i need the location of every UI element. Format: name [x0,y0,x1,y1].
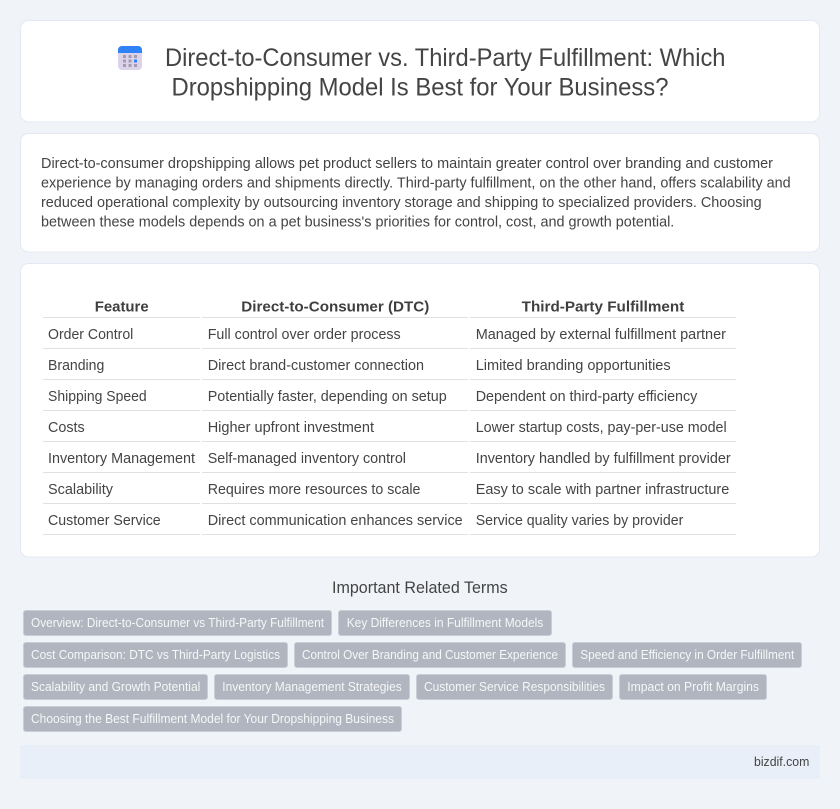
tag: Overview: Direct-to-Consumer vs Third-Party Fulfillment [31,616,324,630]
panel: summary [20,134,820,252]
panel: title card [20,20,820,122]
summary text [41,156,791,230]
tag: Scalability and Growth Potential [31,680,200,694]
row: shipping speed: Dependent on third-party efficiency [476,389,698,405]
tag [24,610,332,636]
summary text: between these models depends on a pet business's priorities for control, cost, and growth potential. [41,214,674,230]
panel: comparison table [20,264,820,557]
summary text: reduced operational complexity by outsourcing inventory storage and shipping to specialized providers. Choosing [41,195,762,211]
row: branding: Branding [48,358,104,374]
tag: Speed and Efficiency in Order Fulfillment [580,648,795,662]
tag: Key Differences in Fulfillment Models [347,616,543,630]
row: inventory management: Self-managed inventory control [208,451,406,467]
table header: Third-Party Fulfillment [522,298,684,316]
tag [416,674,612,700]
row: shipping speed: Potentially faster, depending on setup [208,389,447,405]
row: shipping speed: Shipping Speed [48,389,147,405]
title: Dropshipping Model Is Best for Your Business? [172,74,668,102]
row: shipping speed [48,389,698,405]
row: inventory management: Inventory handled by fulfillment provider [476,451,731,467]
row: scalability: Scalability [48,482,114,498]
tag [572,642,802,668]
tag list: related terms [24,610,802,732]
row: branding: Direct brand-customer connection [208,358,424,374]
row: branding [48,358,671,374]
row: branding: Limited branding opportunities [476,358,671,374]
icon: calendar [118,46,142,70]
tag [294,642,566,668]
tag: Inventory Management Strategies [222,680,402,694]
row: costs [48,420,727,436]
tag: Control Over Branding and Customer Experience [302,648,558,662]
row: order control: Full control over order process [208,327,401,343]
row: customer service: Direct communication enhances service [208,513,463,529]
tag [620,674,766,700]
table header [95,298,684,316]
row: costs: Costs [48,420,85,436]
table header: Direct-to-Consumer (DTC) [241,298,429,316]
row: order control: Managed by external fulfillment partner [476,327,726,343]
row: customer service [48,513,683,529]
tag [214,674,410,700]
row: costs: Higher upfront investment [208,420,374,436]
row: scalability: Requires more resources to scale [208,482,420,498]
row: inventory management [48,451,731,467]
tag: Impact on Profit Margins [627,680,759,694]
title [165,45,726,102]
tag: Choosing the Best Fulfillment Model for Your Dropshipping Business [31,712,394,726]
footer [20,745,820,779]
row: costs: Lower startup costs, pay-per-use model [476,420,727,436]
row: order control [48,327,726,343]
tag [24,674,208,700]
footer: bizdif.com [754,754,809,769]
tag [24,706,402,732]
summary text: experience by managing orders and shipments directly. Third-party fulfillment, on the other hand, offers scalability and [41,176,791,192]
table header: Feature [95,298,149,316]
row: customer service: Customer Service [48,513,161,529]
tag: Cost Comparison: DTC vs Third-Party Logistics [31,648,280,662]
heading: related terms: Important Related Terms [332,579,508,597]
row: customer service: Service quality varies by provider [476,513,683,529]
row: inventory management: Inventory Management [48,451,195,467]
tag: Customer Service Responsibilities [424,680,605,694]
tag [24,642,288,668]
row: order control: Order Control [48,327,133,343]
tag [338,610,552,636]
title: Direct-to-Consumer vs. Third-Party Fulfillment: Which [165,45,726,72]
row: scalability [48,482,729,498]
summary text: Direct-to-consumer dropshipping allows pet product sellers to maintain greater control over branding and customer [41,156,773,172]
row: scalability: Easy to scale with partner infrastructure [476,482,729,498]
